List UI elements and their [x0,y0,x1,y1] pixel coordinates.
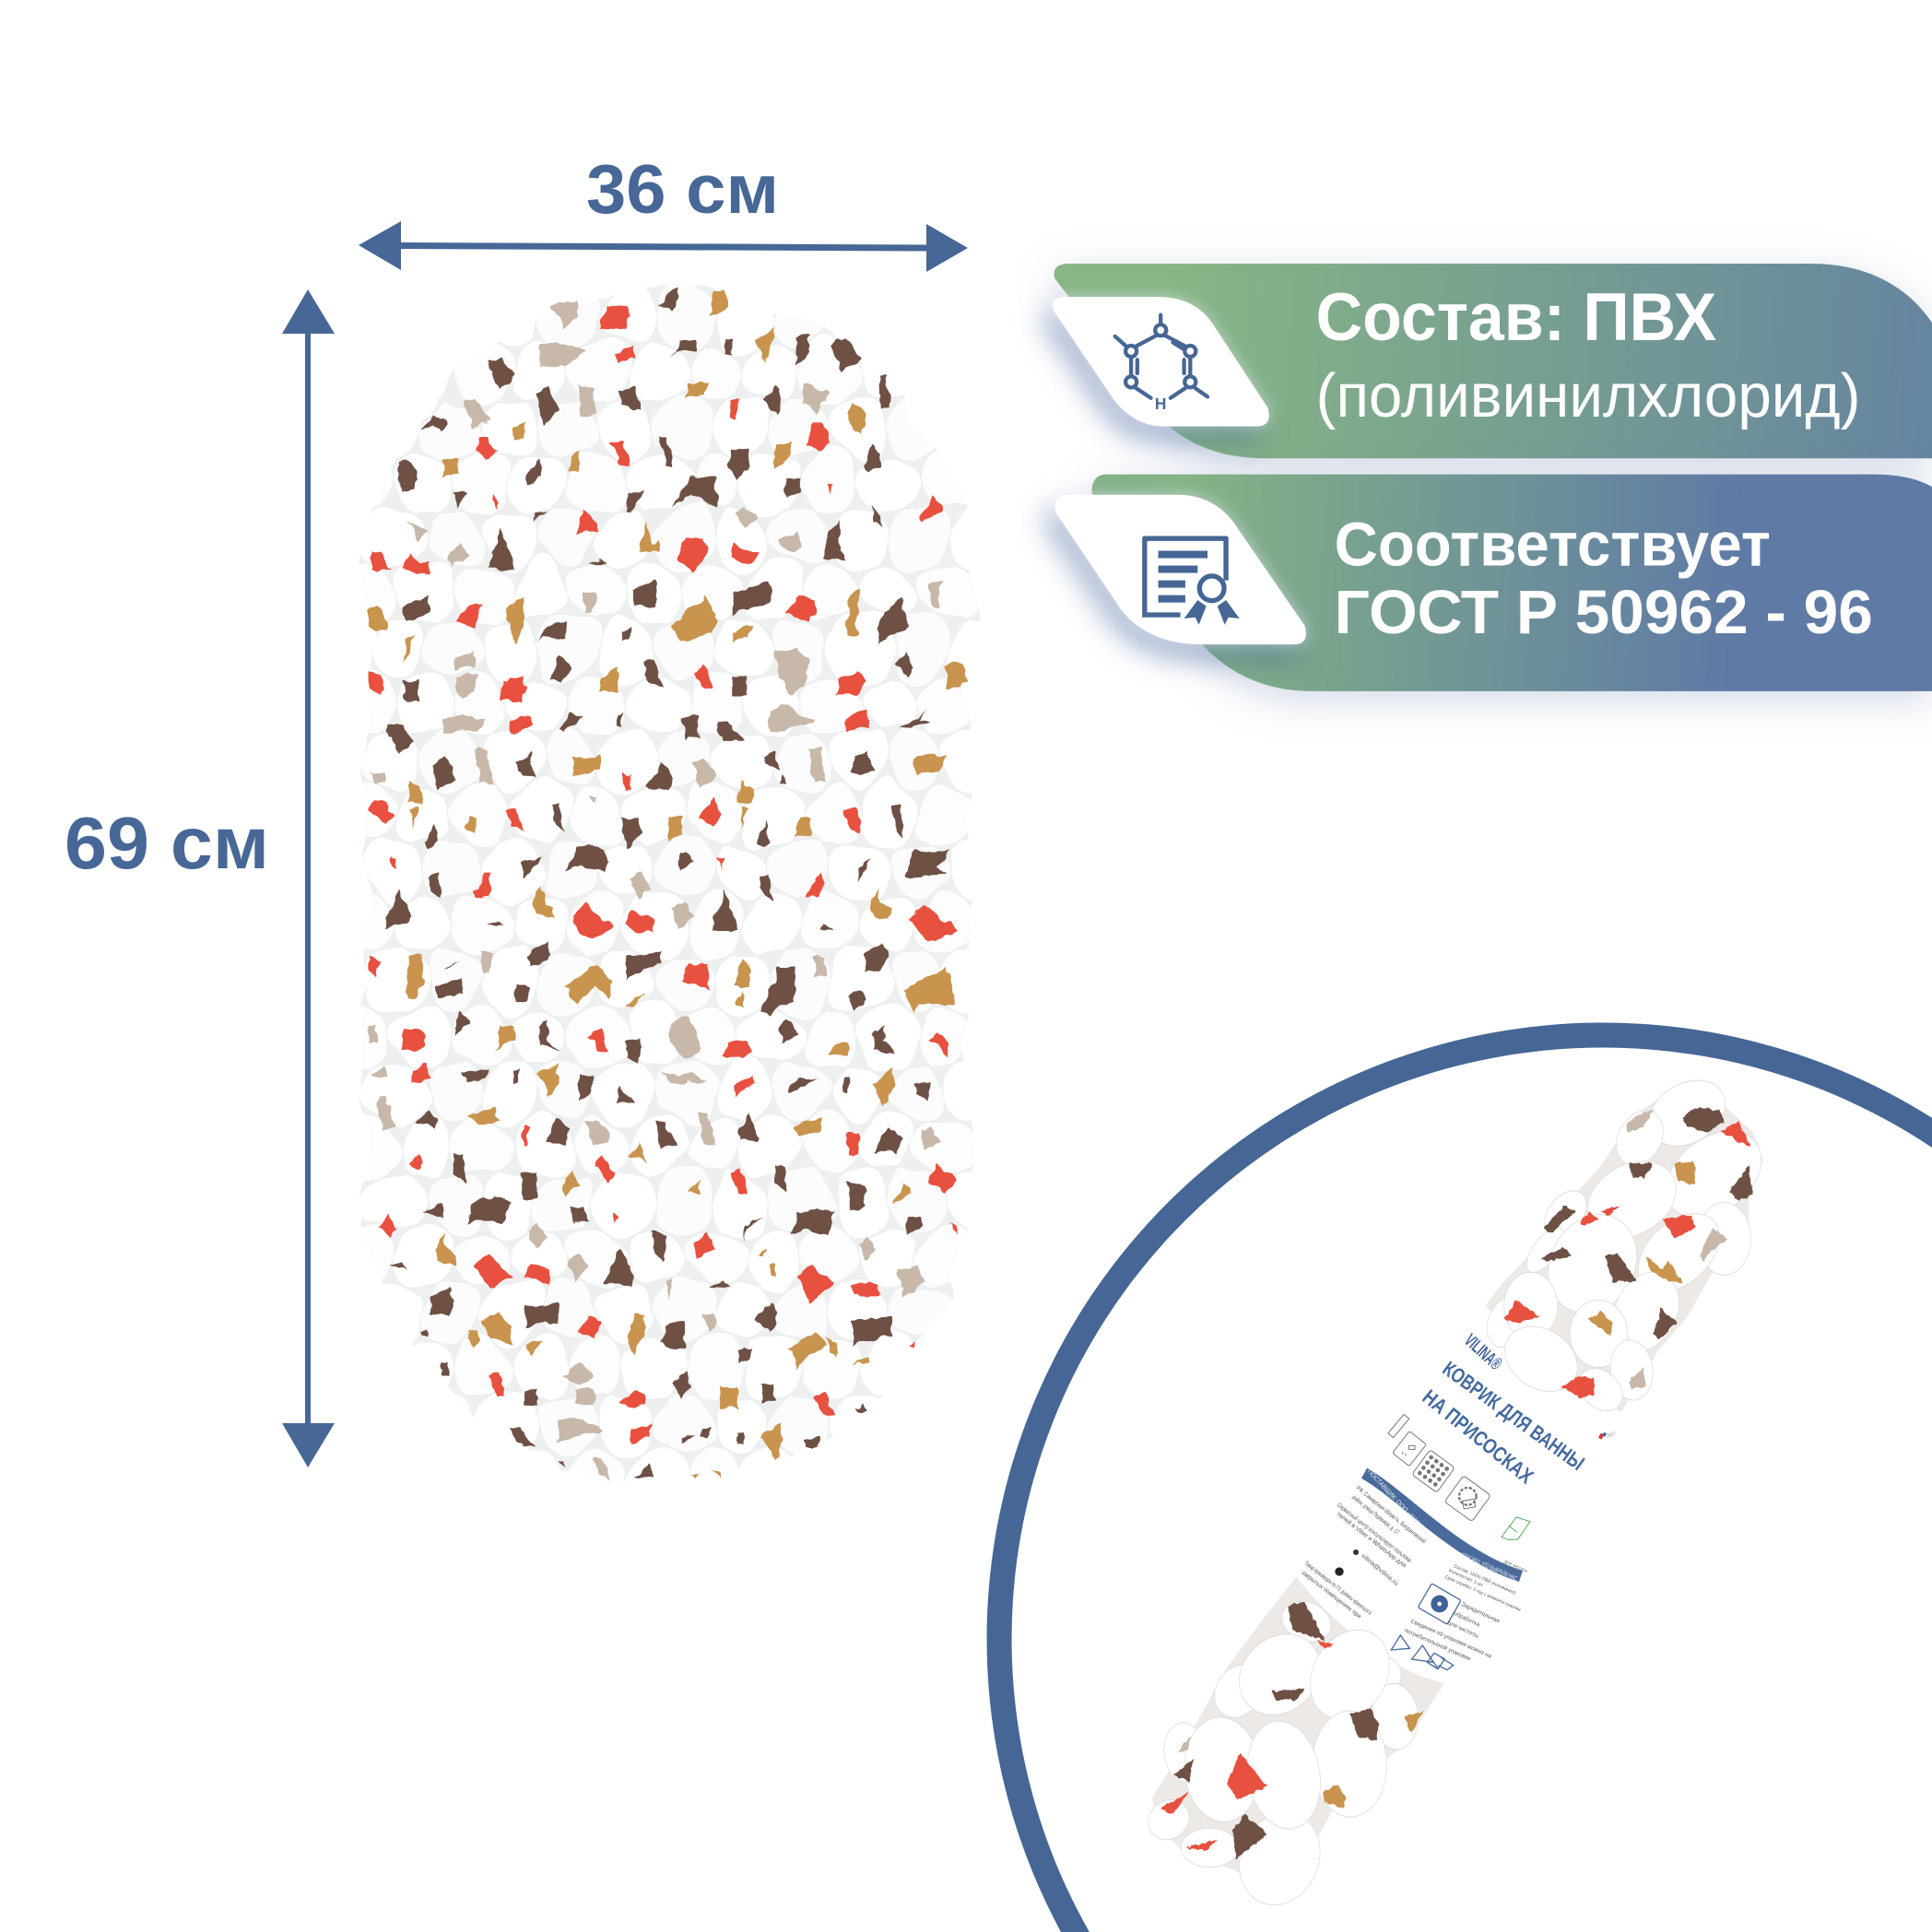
icon: treatment disc [1418,1584,1461,1624]
standard number: ГОСТ Р 50962 - 96 [1335,579,1873,647]
rolled mat: upper part [1479,1069,1770,1419]
info banners [1053,264,1932,691]
address text block: Товар произведён по ТУ, должны храниться в [1303,1561,1372,1617]
address text block: РФ, Самарская область, Богдановский [1355,1484,1428,1545]
treatment caption: Сведения об упаковке можно на [1409,1618,1493,1660]
mat print: middle section [369,719,960,1106]
banner background 1 [1054,264,1932,458]
treatment caption: Количество: 1 шт. [1448,1568,1485,1588]
blue band with supplier text [1364,1468,1521,1583]
address text block [1300,1484,1428,1620]
banner: composition [1053,264,1932,458]
treatment caption: Для чистоты [1503,1559,1529,1573]
mat print: top section [367,288,968,737]
icon: green fold mark [1502,1517,1530,1540]
tag 2 with certificate icon [1054,495,1306,644]
height arrow [282,289,335,1467]
treatment caption: для чистоты [1446,1620,1479,1640]
tag 1 with molecule icon [1053,297,1269,427]
address text block: закрытых помещениях при [1300,1570,1362,1620]
label sleeve [1296,1306,1621,1683]
height label: 69 см [65,802,269,884]
treatment caption [1404,1559,1529,1663]
blue band with supplier text: ПОСТАВЩИК: ООО «ВИЛИНА» [1366,1468,1431,1538]
blue band with supplier text: СПАСИБО, ЧТО ВЫБРАЛИ НАС [1460,1552,1518,1583]
icon: molecule [1115,315,1208,413]
width label: 36 см [586,150,779,228]
product name line 1: КОВРИК ДЛЯ ВАННЫ [1438,1356,1589,1475]
treatment caption: обработка [1453,1609,1481,1629]
treatment caption: потребительской упаковке [1404,1627,1472,1663]
composition detail: (поливинилхлорид) [1316,362,1860,430]
width dimension: 36 cm [359,150,968,272]
banner background 2 [1091,475,1932,691]
rolled mat: lower part [1146,1577,1444,1920]
address text block: vilina@vilina.ru [1360,1553,1399,1587]
icon: small care tiles [1388,1414,1426,1467]
composition title: Состав: ПВХ [1316,278,1716,355]
standard title: Соответствует [1335,512,1771,580]
address text block: телей в Viber и WhatsApp для [1336,1511,1408,1570]
brand name: VILINA® [1460,1330,1506,1374]
address text block: район, улица Первомая, д. 17 [1350,1493,1401,1537]
icon: certificate [1142,536,1240,625]
icon: molecule: H [1155,395,1166,413]
width arrow [359,221,968,272]
product name line 2: НА ПРИСОСКАХ [1419,1384,1538,1489]
treatment caption: Зарядительная [1460,1601,1501,1625]
inset: blue ring [987,1023,1932,1932]
mat print: bottom section [378,1106,956,1479]
icon: suction cups [1412,1450,1455,1492]
flag mark: 2017 [1606,1431,1617,1439]
height dimension: 69 cm [65,289,335,1467]
address text block: Сервисный центр консультирует пользова- [1336,1502,1414,1564]
treatment caption: Состав: 100% ПВХ (поливинил) [1453,1563,1516,1596]
icon: recycling and care marks [1391,1635,1454,1670]
inset photo: rolled mat with label [1146,1069,1770,1920]
mat print fragments [367,288,968,1479]
icon: gear [1444,1476,1490,1522]
label print [1300,1330,1617,1670]
flag mark [1598,1431,1617,1440]
treatment caption: Срок службы: 1 год с момента покупки [1444,1574,1522,1613]
product photo: pebble bath mat [366,288,971,1482]
banner: standard [1054,475,1932,691]
